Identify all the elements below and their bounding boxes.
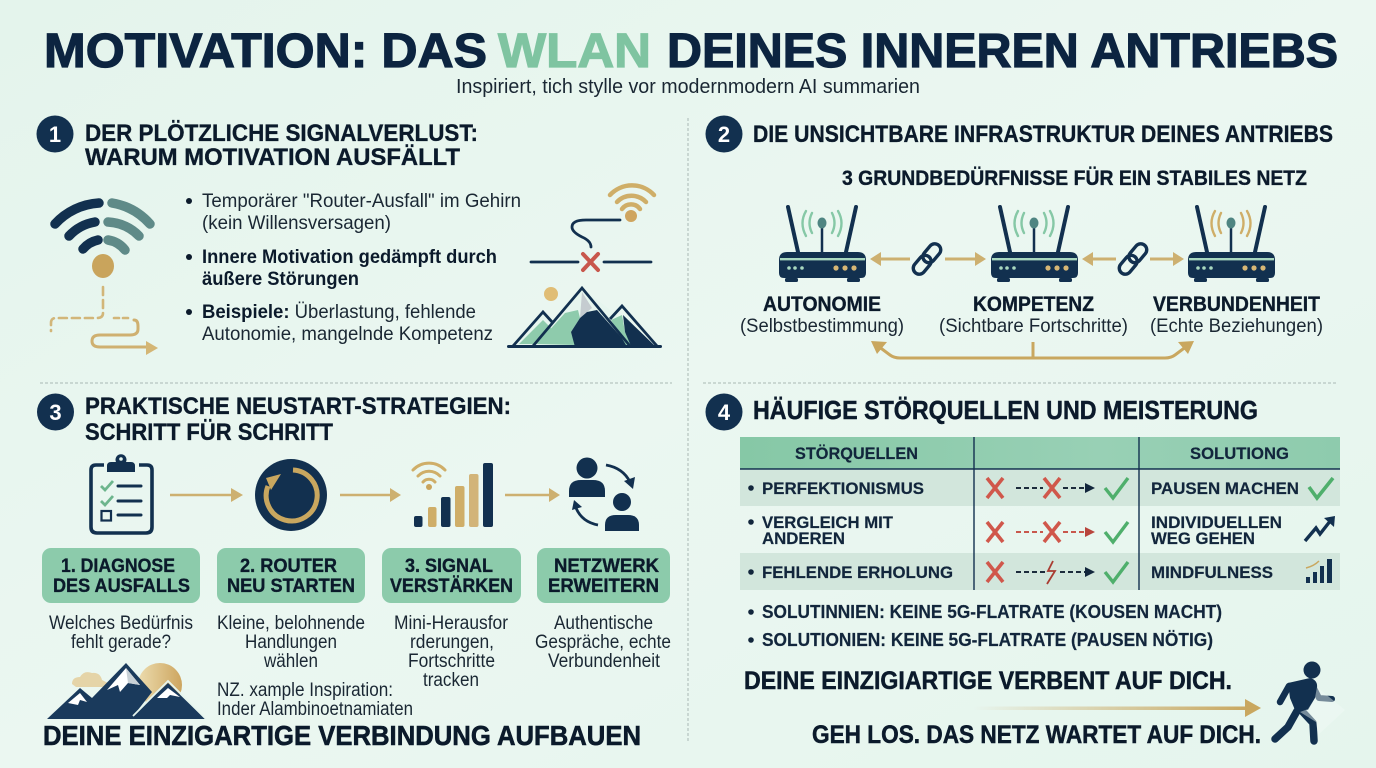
step text 4: Verbundenheit bbox=[548, 651, 661, 672]
step box 2 bbox=[217, 548, 365, 603]
arrow: step 3 to 4 bbox=[505, 488, 560, 502]
arrow: feedback bracket bbox=[871, 341, 1194, 358]
row: Vergleich: VERGLEICH MIT bbox=[762, 513, 894, 532]
label: Kompetenz bbox=[939, 293, 1128, 337]
step text 3: tracken bbox=[423, 670, 479, 691]
table bbox=[740, 437, 1340, 590]
arrow: gold path to walker bbox=[973, 699, 1261, 717]
closing line left: DEINE EINZIGARTIGE VERBINDUNG AUFBAUEN bbox=[43, 720, 641, 751]
panel: section 2 infrastructure bbox=[706, 116, 1333, 358]
bullet list: Beispiele: Überlastung, fehlende bbox=[202, 301, 476, 323]
subtitle: Inspiriert, tich stylle vor modernmodern AI summarien bbox=[456, 76, 920, 98]
label: Verbundenheit bbox=[1150, 293, 1323, 337]
title: WLAN bbox=[498, 25, 651, 78]
arrows and link 2 bbox=[1082, 241, 1184, 277]
step text 3: rderungen, bbox=[410, 632, 494, 653]
step text 2 bbox=[217, 613, 365, 672]
step text 4: Gespräche, echte bbox=[535, 632, 671, 653]
icon: mountains with sun bbox=[47, 663, 206, 719]
row: Vergleich: WEG GEHEN bbox=[1151, 529, 1255, 548]
step text 4: Authentische bbox=[554, 613, 653, 634]
icon: mountains bbox=[507, 287, 662, 348]
closing line lower: GEH LOS. DAS NETZ WARTET AUF DICH. bbox=[812, 721, 1261, 749]
step box 2: NEU STARTEN bbox=[227, 576, 355, 597]
label: Kompetenz: (Sichtbare Fortschritte) bbox=[939, 315, 1128, 337]
label: Autonomie bbox=[740, 293, 904, 337]
step text 1: fehlt gerade? bbox=[71, 632, 171, 653]
row: Vergleich bbox=[748, 513, 1335, 548]
heading 1 bbox=[85, 120, 478, 171]
panel: section 1 signal loss bbox=[36, 116, 662, 355]
bullet list bbox=[186, 190, 521, 345]
step box 2: 2. ROUTER bbox=[240, 556, 337, 577]
arrows and link 1 bbox=[870, 241, 986, 277]
badge 2: 2 bbox=[718, 122, 730, 147]
icon: severed cable with gold wifi bbox=[531, 185, 654, 270]
step text 2: wählen bbox=[263, 651, 318, 672]
icon: walking person bbox=[1275, 662, 1345, 741]
heading 3: SCHRITT FÜR SCHRITT bbox=[85, 419, 333, 446]
step box 1 bbox=[42, 548, 200, 603]
heading 1: DER PLÖTZLICHE SIGNALVERLUST: bbox=[85, 120, 478, 147]
bullet list: Temporärer "Router-Ausfall" im Gehirn bbox=[202, 190, 521, 212]
bullet list: äußere Störungen bbox=[202, 268, 359, 290]
row: Perfektionismus bbox=[748, 478, 1333, 498]
badge 4 bbox=[706, 394, 742, 430]
row: Fehlende Erholung: MINDFULNESS bbox=[1151, 563, 1273, 582]
bullet notes bbox=[748, 601, 1222, 650]
arrow: step 1 to 2 bbox=[170, 488, 243, 502]
badge 2 bbox=[706, 116, 742, 152]
step box 1: DES AUSFALLS bbox=[53, 576, 190, 597]
label: Autonomie: (Selbstbestimmung) bbox=[740, 315, 904, 337]
step text 2: Handlungen bbox=[245, 632, 337, 653]
step box 4 bbox=[537, 548, 670, 603]
bullet notes: SOLUTINNIEN: KEINE 5G-FLATRATE (KOUSEN MACHT) bbox=[762, 601, 1222, 622]
label: Verbundenheit: VERBUNDENHEIT bbox=[1153, 293, 1320, 316]
panel: section 3 restart strategies bbox=[37, 393, 671, 751]
row: Fehlende Erholung bbox=[748, 559, 1332, 584]
table header bbox=[795, 444, 1289, 463]
bullet list: Innere Motivation gedämpft durch bbox=[202, 246, 497, 268]
icon: clipboard bbox=[91, 454, 152, 533]
label: Autonomie: AUTONOMIE bbox=[763, 293, 881, 316]
step box 4: NETZWERK bbox=[554, 556, 659, 577]
example note: Inder Alambinoetnamiaten bbox=[217, 699, 413, 720]
bullet notes: SOLUTIONIEN: KEINE 5G-FLATRATE (PAUSEN NÖTIG) bbox=[762, 629, 1213, 650]
row: Vergleich: ANDEREN bbox=[762, 529, 845, 548]
step box 3: VERSTÄRKEN bbox=[390, 576, 513, 597]
step text 3 bbox=[394, 613, 509, 691]
subheading: 3 GRUNDBEDÜRFNISSE FÜR EIN STABILES NETZ bbox=[842, 167, 1307, 190]
example note bbox=[217, 680, 413, 720]
icon: router 2 bbox=[991, 207, 1078, 282]
table header: STÖRQUELLEN bbox=[795, 444, 918, 463]
title bbox=[44, 25, 1338, 78]
icon: router 1 bbox=[779, 207, 866, 282]
step text 1: Welches Bedürfnis bbox=[49, 613, 193, 634]
step box 3 bbox=[382, 548, 521, 603]
step text 3: Fortschritte bbox=[408, 651, 495, 672]
badge 1: 1 bbox=[49, 122, 61, 147]
icon: restart circle bbox=[255, 459, 327, 531]
icon: people exchange bbox=[569, 458, 639, 531]
badge 1 bbox=[36, 116, 74, 152]
badge 3 bbox=[37, 394, 74, 430]
step text 2: Kleine, belohnende bbox=[217, 613, 365, 634]
closing line upper: DEINE EINZIGIARTIGE VERBENT AUF DICH. bbox=[744, 667, 1232, 695]
heading 1: WARUM MOTIVATION AUSFÄLLT bbox=[85, 144, 460, 171]
step text 4 bbox=[535, 613, 671, 672]
icon: broken wifi with path bbox=[51, 203, 158, 355]
heading 4: HÄUFIGE STÖRQUELLEN UND MEISTERUNG bbox=[753, 395, 1258, 425]
title: MOTIVATION: DAS bbox=[44, 25, 487, 78]
label: Kompetenz: KOMPETENZ bbox=[973, 293, 1094, 316]
step box 1: 1. DIAGNOSE bbox=[61, 556, 175, 577]
bullet list: Autonomie, mangelnde Kompetenz bbox=[202, 323, 493, 345]
table header: SOLUTIONG bbox=[1190, 444, 1289, 463]
label: Verbundenheit: (Echte Beziehungen) bbox=[1150, 315, 1323, 337]
heading 3 bbox=[85, 393, 511, 446]
step box 3: 3. SIGNAL bbox=[405, 556, 493, 577]
step box 4: ERWEITERN bbox=[548, 576, 659, 597]
icon: router 3 bbox=[1188, 207, 1275, 282]
row: Fehlende Erholung: FEHLENDE ERHOLUNG bbox=[762, 563, 953, 582]
badge 3: 3 bbox=[49, 400, 62, 425]
bullet list: (kein Willensversagen) bbox=[202, 212, 391, 234]
example note: NZ. xample Inspiration: bbox=[217, 680, 393, 701]
arrow: step 2 to 3 bbox=[340, 488, 401, 502]
row: Perfektionismus: PERFEKTIONISMUS bbox=[762, 479, 924, 498]
title: DEINES INNEREN ANTRIEBS bbox=[667, 25, 1338, 78]
step text 3: Mini-Herausfor bbox=[394, 613, 509, 634]
row: Perfektionismus: PAUSEN MACHEN bbox=[1151, 479, 1299, 498]
icon: signal bars bbox=[413, 463, 493, 527]
step text 1 bbox=[49, 613, 193, 653]
panel: section 4 interference table bbox=[706, 394, 1345, 749]
heading 3: PRAKTISCHE NEUSTART-STRATEGIEN: bbox=[85, 393, 511, 420]
row: Vergleich: INDIVIDUELLEN bbox=[1151, 513, 1282, 532]
badge 4: 4 bbox=[718, 400, 731, 425]
